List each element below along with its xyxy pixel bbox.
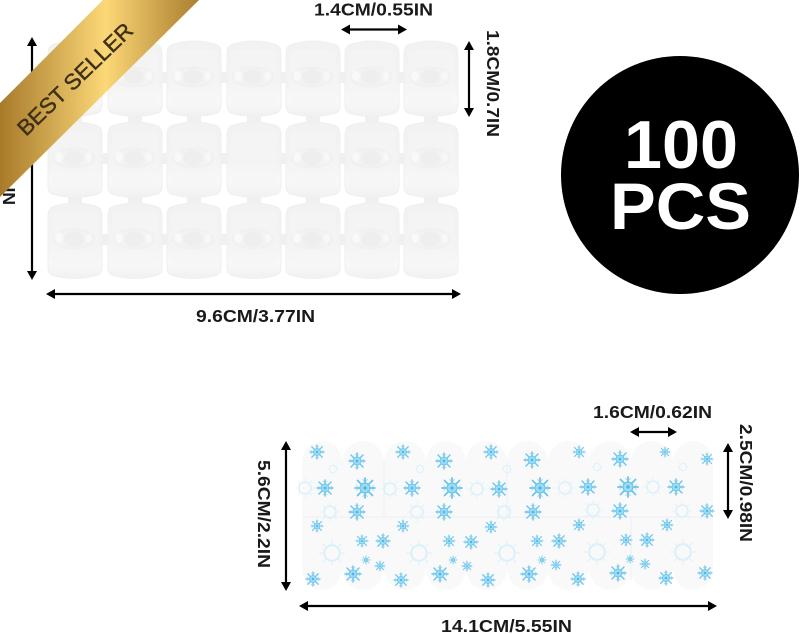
arrow: sticker sheet width (299, 601, 717, 611)
label: sticker width: 1.6CM/0.62IN (593, 402, 712, 422)
arrow: tip width (341, 24, 407, 34)
arrow: sticker sheet height (281, 441, 291, 591)
label: tips sheet width: 9.6CM/3.77IN (196, 306, 315, 326)
snowflake motifs (306, 445, 714, 587)
badge: best seller ribbon (0, 0, 199, 197)
row 1 of nail tips (48, 41, 458, 116)
arrow: sticker height (723, 443, 733, 519)
faint ring motifs (295, 461, 696, 566)
badge: best seller ribbon: BEST SELLER (12, 18, 138, 141)
row 3 of nail tips (48, 203, 458, 278)
badge: 100 pcs circle: 100 (624, 107, 738, 183)
label: tip height: 1.8CM/0.7IN (483, 30, 503, 137)
arrow: tip height (464, 41, 474, 117)
label: sticker height: 2.5CM/0.98IN (736, 424, 756, 542)
panel: snowflake nail sticker sheet (295, 441, 714, 590)
arrow: tips sheet width (46, 289, 461, 299)
sticker sheet base (302, 441, 713, 590)
label: tip width: 1.4CM/0.55IN (314, 0, 433, 20)
tip connectors (68, 72, 438, 245)
badge: 100 pcs circle: PCS (610, 169, 751, 243)
row 2 of nail tips (48, 122, 458, 198)
panel: clear nail tips sheet (48, 41, 458, 278)
badge: 100 pcs circle (561, 56, 799, 294)
arrow: tips sheet height (27, 37, 37, 280)
arrow: sticker width (630, 427, 677, 437)
label: sticker sheet height: 5.6CM/2.2IN (254, 460, 274, 568)
